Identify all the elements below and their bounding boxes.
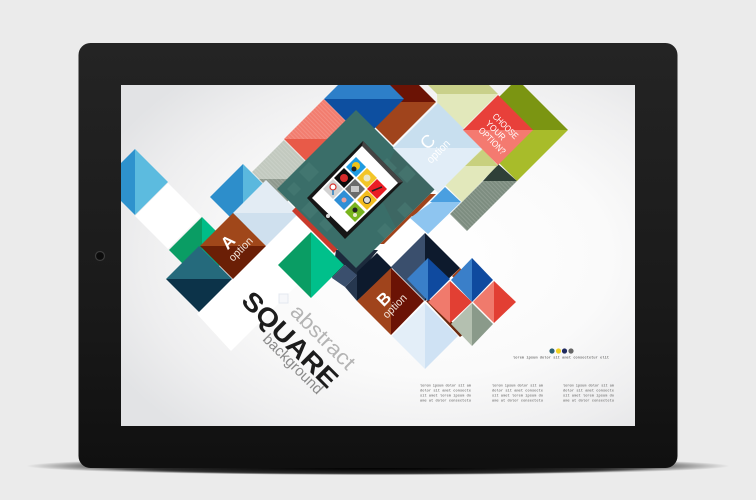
gray square top <box>252 140 305 202</box>
blue squares pair <box>407 258 493 302</box>
small outline square <box>279 294 288 303</box>
green square large <box>278 232 344 298</box>
label option: option <box>227 235 256 264</box>
brown square top <box>376 85 436 145</box>
pale blue square option C <box>393 103 483 193</box>
text column 3: lorem ipsum dolor sit am <box>563 384 615 388</box>
text column 3: sit amet lorem ipsum do <box>563 394 614 398</box>
home button <box>326 214 330 218</box>
white square left <box>135 183 201 249</box>
text column 1: ame at dolor consectetu <box>420 398 471 404</box>
text column 2: sit amet lorem ipsum do <box>492 394 543 398</box>
title line background: background <box>259 331 326 398</box>
title line abstract: abstract <box>285 300 360 375</box>
text column 3 <box>563 384 615 404</box>
tablet body <box>78 43 678 468</box>
text column 3: dolor sit amet consecte <box>563 388 614 394</box>
blue square top <box>324 85 404 128</box>
text column 3: ame at dolor consectetu <box>563 398 614 404</box>
gray square small <box>451 303 493 346</box>
green square small <box>169 217 220 266</box>
text column 1: dolor sit amet consecte <box>420 388 471 394</box>
text column 2: dolor sit amet consecte <box>492 388 543 394</box>
gray green block <box>450 164 517 231</box>
brown square option A <box>200 213 266 279</box>
label C: C <box>416 130 439 153</box>
text column 1 <box>420 384 472 404</box>
navy square right <box>391 233 460 301</box>
dark teal square <box>166 246 232 312</box>
white band diagonal <box>198 286 254 350</box>
pale blue square <box>233 180 299 246</box>
callout text: OPTION? <box>477 125 508 156</box>
text column 2 <box>492 384 544 404</box>
brown square option B <box>357 268 424 335</box>
camera <box>96 252 104 260</box>
icon tiles <box>323 157 387 222</box>
salmon square top <box>284 99 346 160</box>
brown strip <box>426 299 464 337</box>
teal panel <box>277 110 435 268</box>
salmon squares pair <box>428 281 516 323</box>
white band centre <box>384 216 412 244</box>
title <box>236 285 360 398</box>
artwork: square mosaic <box>121 85 568 369</box>
faded icons <box>385 161 416 239</box>
red strip below panel <box>292 207 338 253</box>
text column 1: lorem ipsum dolor sit am <box>420 384 472 388</box>
yellow green block <box>428 85 498 202</box>
screen background <box>121 85 635 426</box>
text column 2: ame at dolor consectetu <box>492 398 543 404</box>
red square callout <box>463 95 533 165</box>
pale blue square bottom <box>392 303 458 369</box>
mini tablet <box>307 141 403 239</box>
text column 2: lorem ipsum dolor sit am <box>492 384 544 388</box>
callout text: YOUR <box>484 118 508 143</box>
small blue block <box>410 187 461 234</box>
text column 1: sit amet lorem ipsum do <box>420 394 471 398</box>
brown strip below panel <box>380 194 436 244</box>
blue square left <box>121 149 168 215</box>
colour dots <box>549 348 574 354</box>
callout text: CHOOSE <box>491 111 520 141</box>
label B: B <box>373 288 395 310</box>
label option: option <box>381 292 410 321</box>
label A: A <box>217 231 239 253</box>
blue square mid <box>210 164 262 226</box>
small heading line: lorem ipsum dolor sit amet consectetur elit <box>513 356 609 360</box>
label option: option <box>425 138 453 166</box>
navy block <box>332 250 392 301</box>
olive square <box>500 85 568 181</box>
callout text <box>479 114 519 154</box>
ground shadow <box>26 457 730 475</box>
title line SQUARE: SQUARE <box>236 285 345 394</box>
